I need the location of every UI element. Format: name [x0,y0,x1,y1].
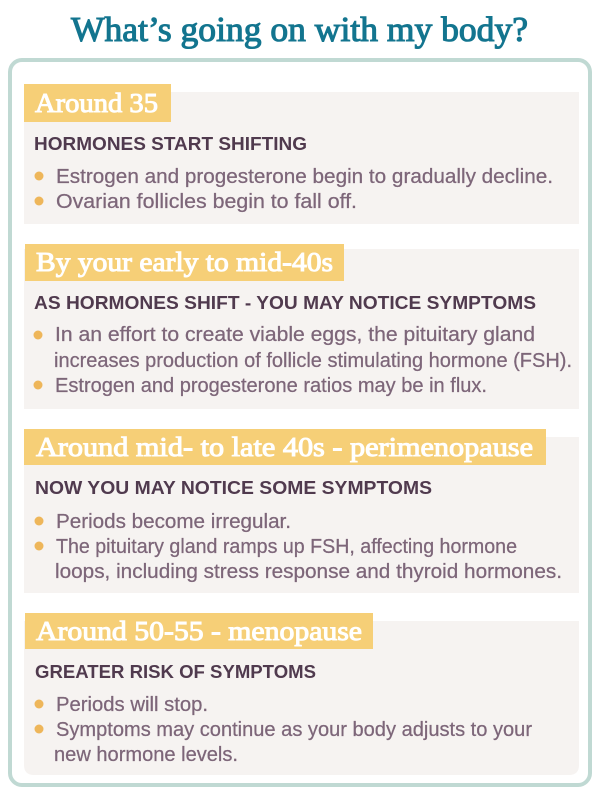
tag: mid- to late 40s: Around mid- to late 40s - perimenopause [36,432,533,462]
tag: around 35: Around 35 [35,88,158,118]
heading: as hormones shift: AS HORMONES SHIFT - YOU MAY NOTICE SYMPTOMS [34,293,536,313]
tag: around 35 [24,84,171,122]
title: What’s going on with my body? [71,10,528,49]
bullet list: Estrogen and progesterone begin to gradually decline. [56,166,553,188]
bullet list: The pituitary gland ramps up FSH, affecting hormone [56,536,517,558]
heading: greater risk: GREATER RISK OF SYMPTOMS [35,662,316,682]
bullet list [34,511,562,583]
heading: now you may notice: NOW YOU MAY NOTICE SOME SYMPTOMS [35,478,432,498]
bullet list: Periods will stop. [56,694,208,716]
panel: early to mid-40s [24,244,579,409]
bullet list: new hormone levels. [54,744,238,766]
tag: early to mid-40s [25,244,344,281]
panel: around 50-55 [24,613,579,775]
tag: around 50-55: Around 50-55 - menopause [36,616,362,646]
bullet list: loops, including stress response and thyroid hormones. [55,561,562,583]
heading: hormones start shifting: HORMONES START SHIFTING [34,134,307,154]
bullet list: Ovarian follicles begin to fall off. [56,191,357,213]
bullet list: Periods become irregular. [56,511,291,533]
bullet list [34,166,553,213]
bullet list: In an effort to create viable eggs, the pituitary gland [55,324,535,346]
bullet list [34,324,572,397]
bullet list [34,694,532,766]
panel: mid- to late 40s [24,429,579,593]
tag: early to mid-40s: By your early to mid-40s [36,247,333,277]
panel: around 35 [24,84,579,224]
bullet list: Estrogen and progesterone ratios may be in flux. [55,375,487,397]
bullet list: increases production of follicle stimulating hormone (FSH). [54,350,572,372]
bullet list: Symptoms may continue as your body adjusts to your [56,719,532,741]
